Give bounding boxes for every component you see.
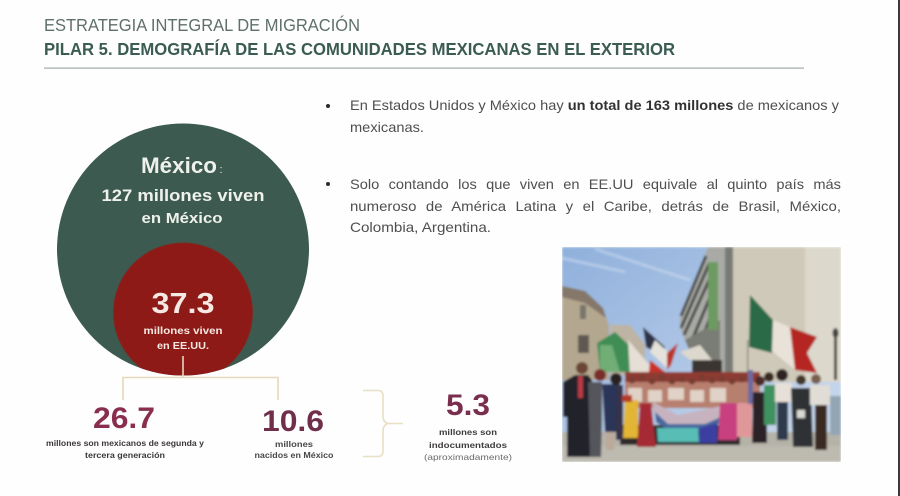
México label: en México [142, 210, 222, 227]
bullet 2: numeroso de América Latina y el Caribe, detrás de Brasil, México, [350, 198, 841, 214]
bullet 2 [326, 176, 841, 235]
connector: tree from circle to sub-figures [123, 356, 278, 400]
bullet 2: Solo contando los que viven en EE.UU equivale al quinto país más [350, 176, 841, 192]
caption: 5.3: indocumentados [429, 440, 507, 450]
right group [752, 392, 767, 443]
yellow skirt [623, 400, 638, 438]
red skirt [637, 403, 656, 447]
caption: 5.3: (aproximadamente) [424, 452, 512, 462]
México label: : [219, 164, 223, 176]
caption: 10.6: millones [275, 439, 313, 449]
green circle: México [57, 124, 309, 376]
stat: 10.6: 10.6 [262, 405, 324, 438]
blue dress woman [602, 384, 620, 432]
man with red tie [563, 375, 592, 457]
stat: 5.3: 5.3 [446, 389, 490, 422]
caption: 26.7: millones son mexicanos de segunda y [46, 438, 204, 448]
bullet 2: Colombia, Argentina. [350, 219, 491, 235]
bullet 1: mexicanas. [350, 119, 424, 135]
lamp post [834, 330, 837, 380]
red circle: EE.UU. [114, 243, 252, 382]
caption: 5.3: millones son [439, 427, 497, 437]
title: strategy line: ESTRATEGIA INTEGRAL DE MIGRACIÓN [44, 14, 360, 35]
stat: 5.3 [424, 389, 512, 462]
EE.UU. label: en EE.UU. [157, 341, 209, 352]
EE.UU. label: 37.3 [152, 288, 214, 320]
caption: 10.6 [254, 439, 334, 460]
subtitle: pillar 5: PILAR 5. DEMOGRAFÍA DE LAS COMUNIDADES MEXICANAS EN EL EXTERIOR [44, 38, 675, 59]
gray suit person [588, 382, 602, 457]
text block: bullets [326, 97, 841, 235]
crowd mass [625, 376, 760, 408]
bullet 1: En Estados Unidos y México hay un total de 163 millones de mexicanos y [350, 97, 839, 113]
stat: 26.7 [46, 402, 204, 460]
circle diagram [57, 124, 309, 382]
left building [562, 286, 609, 380]
heads [628, 374, 746, 384]
left flags [596, 326, 679, 374]
header [44, 14, 675, 59]
caption: 26.7: tercera generación [85, 450, 165, 460]
banner [651, 402, 721, 432]
México label: 127 millones viven [102, 187, 264, 205]
right pale building [733, 247, 805, 382]
ground [562, 430, 841, 448]
caption: 26.7 [46, 438, 204, 460]
photo: crowd with Mexican flags [562, 247, 841, 462]
México label [102, 153, 264, 227]
central building [679, 247, 726, 374]
sky [562, 247, 841, 434]
pink and striped dresses [718, 403, 737, 440]
EE.UU. label [144, 288, 222, 352]
EE.UU. label: millones viven [144, 326, 222, 337]
México label: México [141, 153, 217, 178]
white blouses [628, 388, 726, 402]
turquoise skirts [657, 428, 699, 442]
big flag [746, 294, 818, 374]
stat: 26.7: 26.7 [93, 402, 155, 435]
bracket [363, 390, 403, 456]
caption: 10.6: nacidos en México [254, 450, 334, 460]
bullet 1 [326, 97, 839, 135]
stat: 10.6 [254, 405, 334, 460]
caption: 5.3 [424, 427, 512, 462]
